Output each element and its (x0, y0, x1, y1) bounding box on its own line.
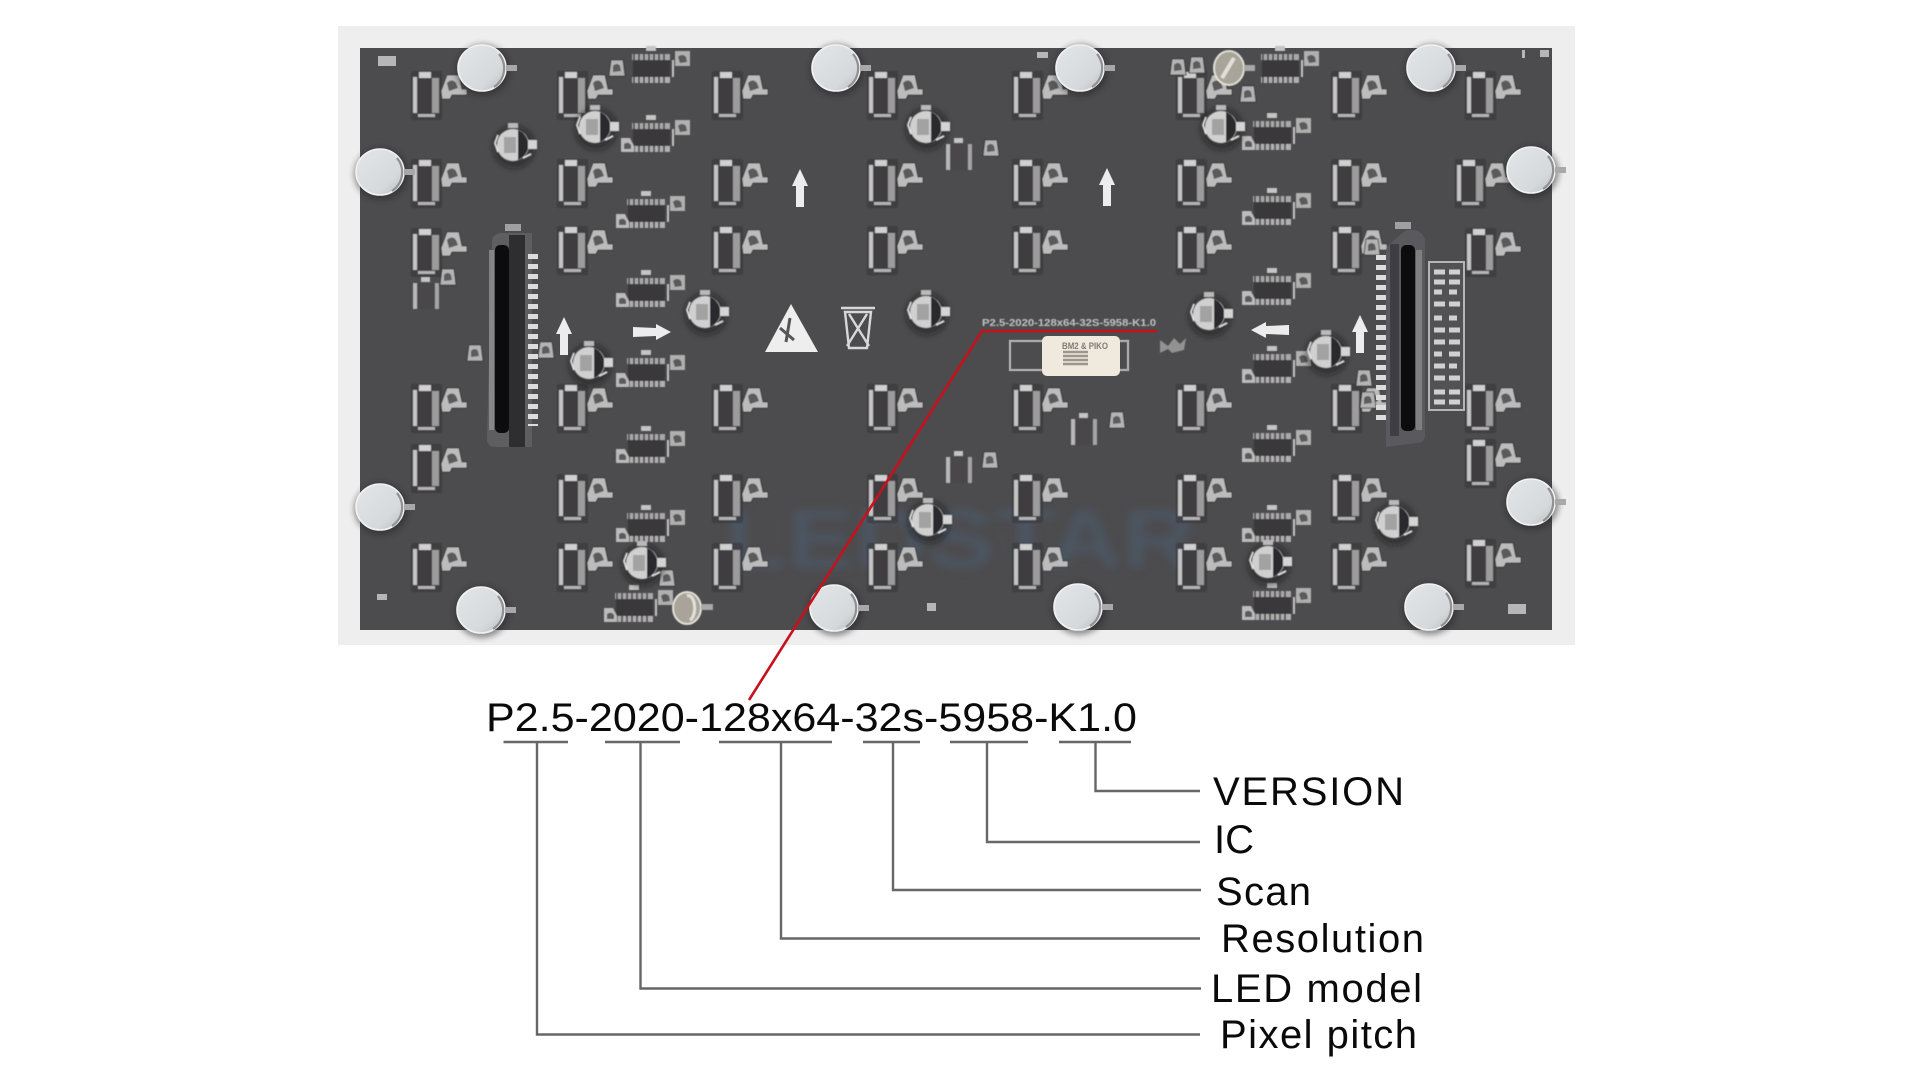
connector: LED model (640, 742, 1201, 988)
code breakdown connector lines (504, 742, 1201, 1034)
connector: scan (893, 742, 1201, 890)
capacitors (493, 51, 1418, 624)
model code text: P2.5-2020-128x64-32s-5958-K1.0 (486, 696, 1137, 740)
silkscreen model code: P2.5-2020-128x64-32S-5958-K1.0 (982, 317, 1156, 329)
pin label block (1429, 262, 1464, 410)
watermark: LEDSTAR (725, 492, 1195, 586)
label: Pixel pitch: Pixel pitch (1220, 1013, 1417, 1057)
mounting posts (354, 44, 1566, 638)
small passive pads (440, 57, 1380, 586)
icon: ESD warning triangle (765, 304, 818, 352)
panel: LED module photo (338, 26, 1575, 645)
connector: IC (987, 742, 1200, 842)
scan ICs (604, 46, 1319, 622)
small pads (377, 50, 1549, 614)
red pointer line (749, 331, 1157, 700)
right connector (1381, 222, 1425, 447)
connector: resolution (781, 742, 1200, 938)
connector: pixel pitch (537, 742, 1200, 1034)
sticker label: BM2 & PIKO (1062, 341, 1108, 351)
sticker label (1010, 336, 1128, 376)
label: Resolution: Resolution (1221, 917, 1424, 961)
label: LED model: LED model (1211, 967, 1422, 1011)
label: Scan: Scan (1216, 870, 1311, 914)
panel: circuit board (360, 48, 1552, 630)
small transistor chips (413, 138, 1097, 483)
label: IC: IC (1214, 818, 1254, 862)
label: VERSION: VERSION (1213, 770, 1404, 814)
connector: version (1096, 742, 1200, 791)
direction arrows (556, 168, 1368, 355)
silkscreen smudge (1160, 338, 1186, 353)
panel frame (338, 26, 1575, 645)
icon: crossed-out bin (841, 308, 875, 348)
left connector (487, 224, 533, 447)
driver chips grid (411, 71, 1521, 592)
